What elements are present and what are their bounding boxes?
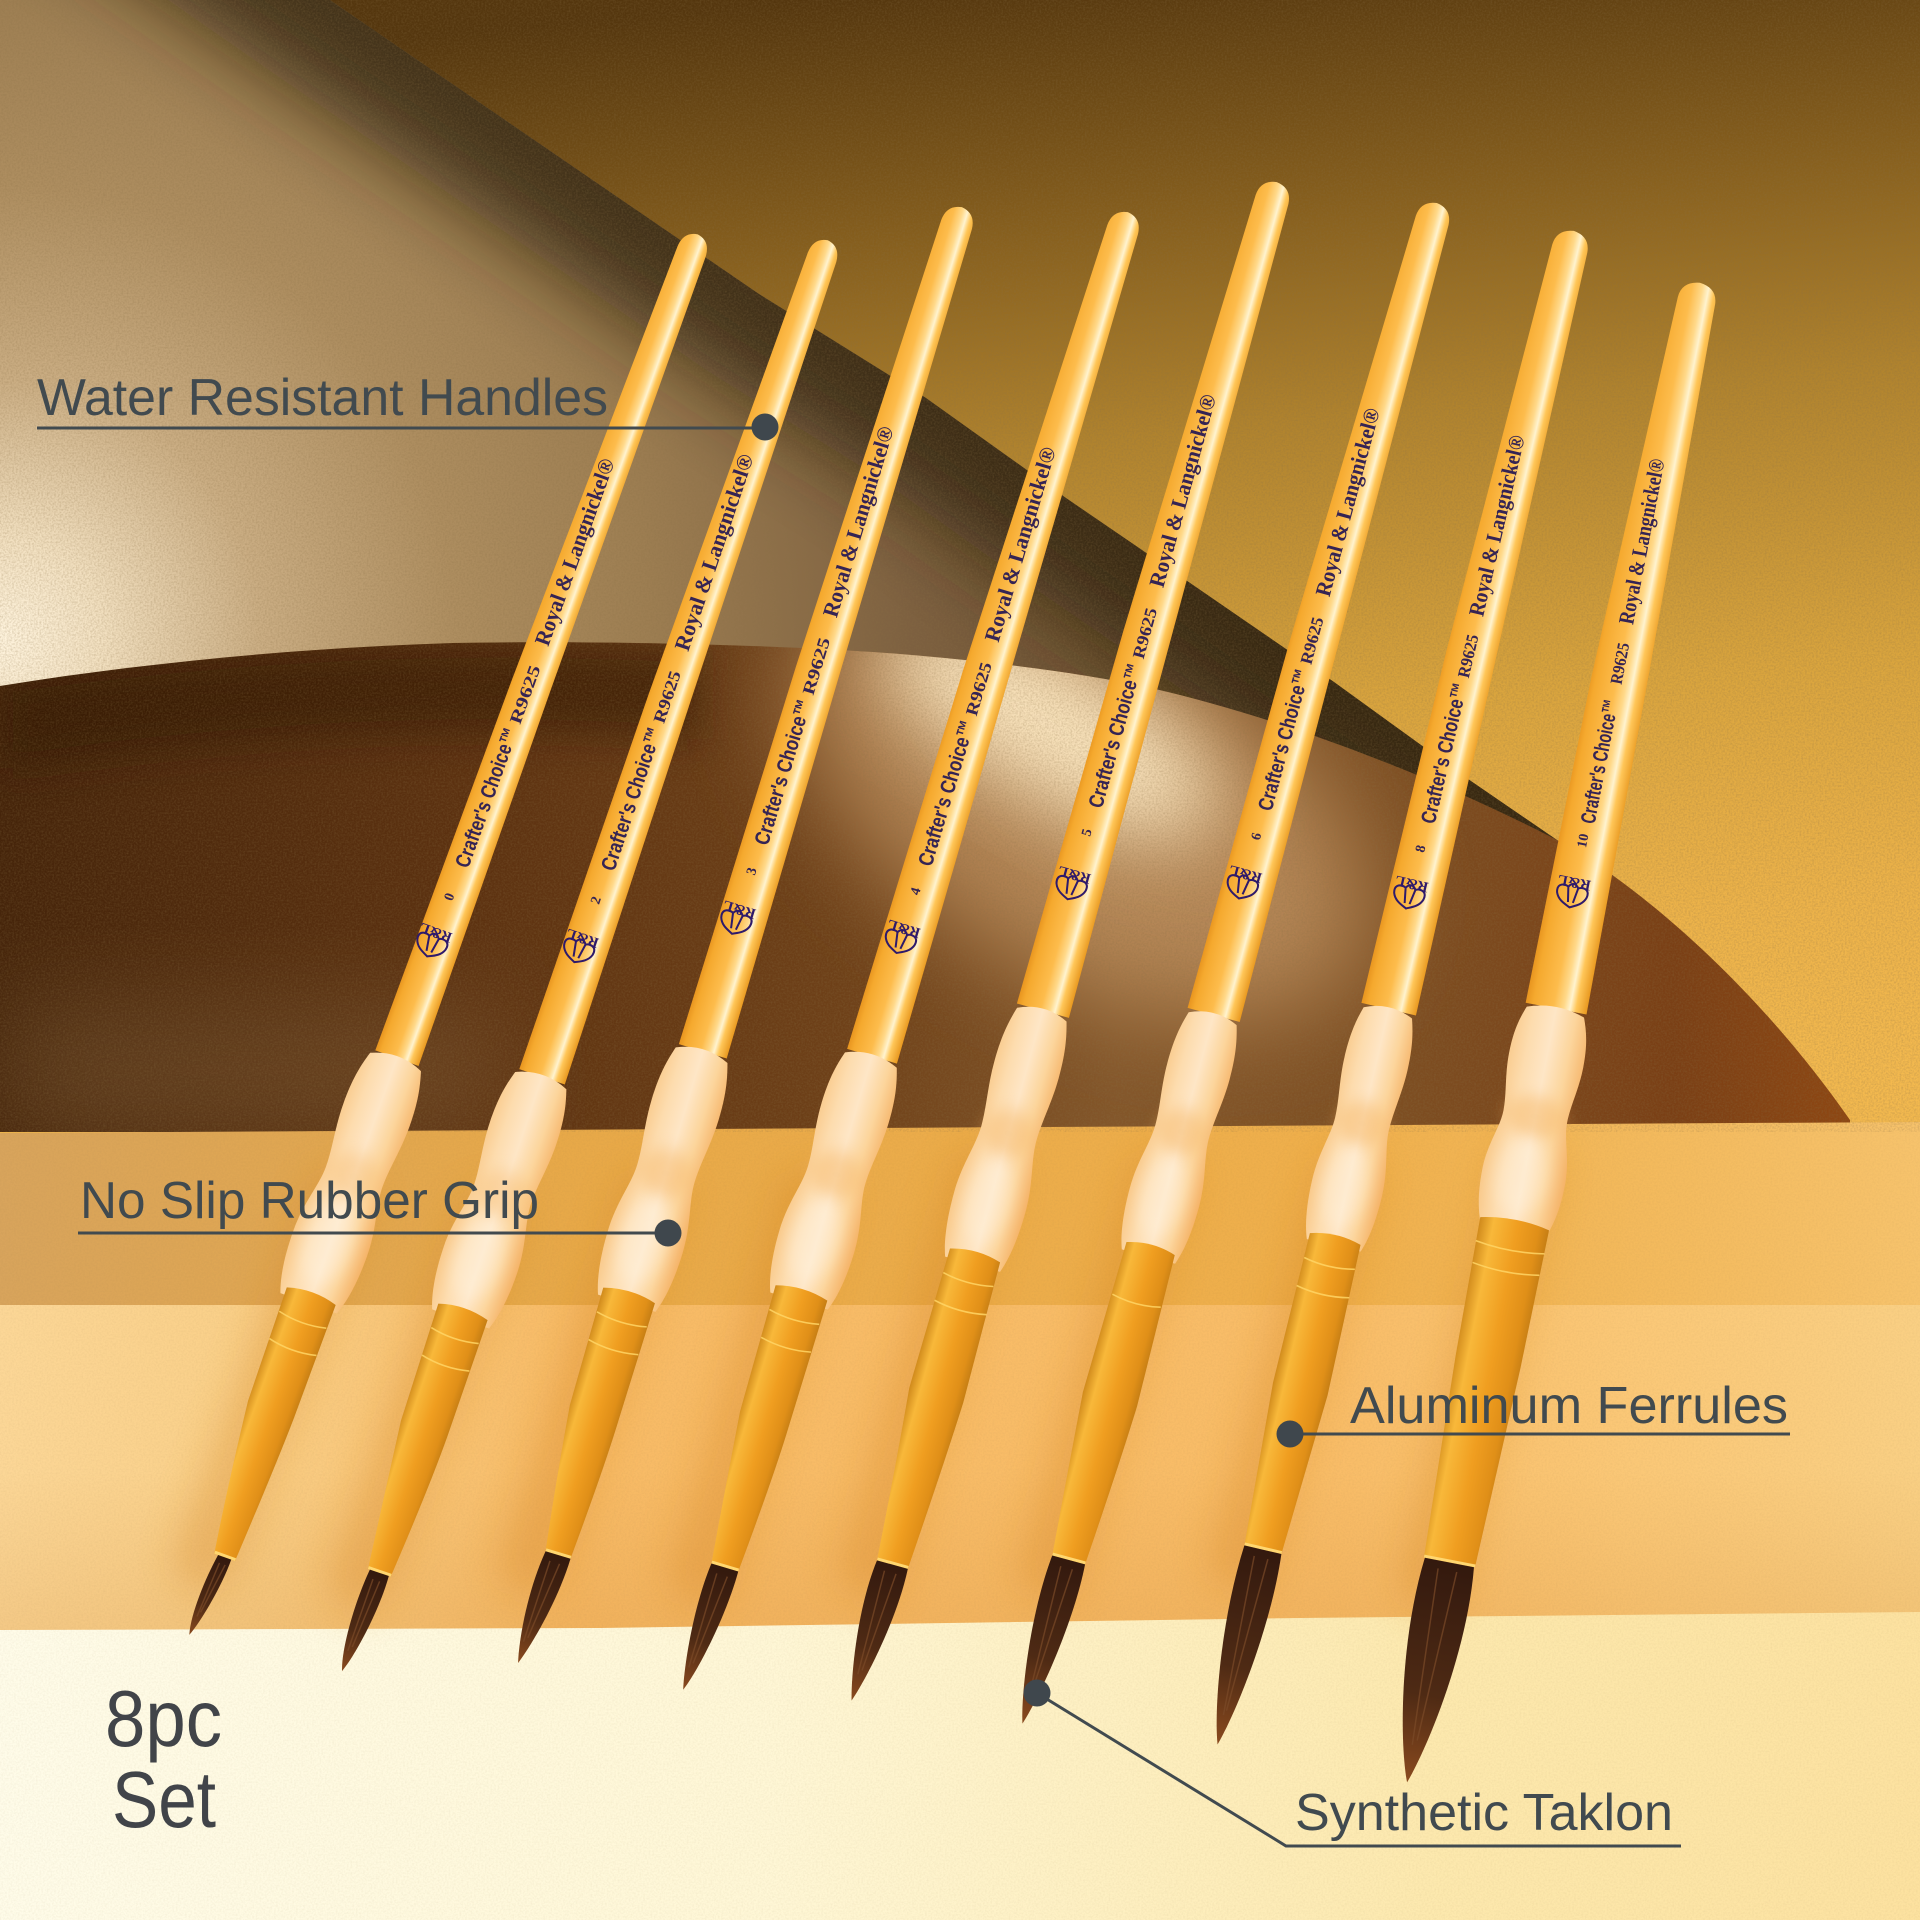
- bristles: [186, 1554, 231, 1640]
- handle lettering: [559, 449, 761, 967]
- brush: size 5: [816, 171, 1309, 1711]
- handle: [847, 204, 1149, 1064]
- handle lettering: [716, 422, 901, 939]
- background: lower band edge shading: [0, 1470, 1920, 1635]
- background: middle paper band: [0, 1122, 1920, 1308]
- handle lettering: Royal & Langnickel®: [1144, 391, 1221, 590]
- handle lettering: 8: [1413, 844, 1429, 854]
- bristles: [1006, 1555, 1086, 1729]
- background: upper metallic sheet: [0, 0, 1558, 840]
- bristles: [1198, 1545, 1283, 1749]
- brush: size 10: [1366, 274, 1737, 1790]
- bristles: [334, 1569, 389, 1676]
- handle lettering: Crafter's Choice™: [1577, 697, 1623, 826]
- handle lettering: R9625: [1129, 606, 1161, 661]
- handle lettering: Royal & Langnickel®: [1463, 433, 1530, 618]
- handle lettering: R&L: [564, 925, 601, 950]
- callout: water resistant handles: [37, 369, 778, 440]
- grip: [937, 999, 1079, 1274]
- ferrule: [525, 1284, 656, 1561]
- handle lettering: 0: [442, 891, 458, 903]
- handle lettering: [1553, 455, 1672, 911]
- handle: [679, 199, 982, 1059]
- handle lettering: R9625: [962, 660, 996, 718]
- brush: size 4: [646, 200, 1161, 1701]
- background: cream bottom sheet: [0, 1612, 1920, 1920]
- handle lettering: R9625: [1607, 641, 1633, 686]
- handle lettering: R&L: [721, 896, 758, 921]
- label: 8pc set: [105, 1674, 222, 1844]
- background: gold paper: [0, 0, 1920, 1140]
- handle lettering: Crafter's Choice™: [1085, 661, 1147, 810]
- handle lettering: R&L: [1394, 872, 1430, 895]
- handle lettering: Royal & Langnickel®: [1613, 457, 1670, 626]
- handle lettering: [881, 442, 1063, 958]
- handle lettering: Royal & Langnickel®: [529, 455, 620, 649]
- handle lettering: R&L: [1227, 861, 1264, 885]
- bristles: [510, 1550, 570, 1669]
- handle lettering: R9625: [506, 663, 544, 727]
- handle lettering: 2: [588, 895, 605, 906]
- callout: synthetic taklon: [1024, 1680, 1681, 1846]
- background: lower bronze sheet: [0, 642, 1850, 1132]
- label: 8pc set: 8pc: [105, 1674, 222, 1763]
- callout: synthetic taklon: Synthetic Taklon: [1295, 1784, 1673, 1842]
- brush shadows: [205, 1170, 1525, 1580]
- handle: [1188, 195, 1459, 1022]
- handle lettering: 5: [1079, 827, 1096, 838]
- label: 8pc set: Set: [112, 1755, 216, 1844]
- brush: size 0: [153, 220, 731, 1648]
- grip: [589, 1038, 741, 1315]
- handle lettering: R9625: [1297, 615, 1327, 666]
- handle: [519, 231, 847, 1084]
- handle lettering: Crafter's Choice™: [451, 725, 523, 871]
- handle lettering: R9625: [799, 635, 834, 697]
- handle lettering: R&L: [418, 919, 454, 945]
- callout: no slip rubber grip: [78, 1172, 682, 1246]
- bristles: [1380, 1557, 1476, 1788]
- bristles: [837, 1560, 908, 1706]
- ferrule: [1415, 1213, 1550, 1569]
- handle lettering: 3: [744, 866, 761, 877]
- grip: [762, 1043, 910, 1312]
- grip: [1299, 999, 1424, 1254]
- handle lettering: Crafter's Choice™: [914, 718, 979, 869]
- handle lettering: Royal & Langnickel®: [1310, 405, 1385, 599]
- handle lettering: [1052, 390, 1224, 904]
- callout: no slip rubber grip: No Slip Rubber Grip: [80, 1172, 539, 1230]
- ferrule: [1236, 1229, 1363, 1556]
- handle lettering: [1223, 404, 1387, 903]
- handle lettering: Crafter's Choice™: [1417, 680, 1472, 826]
- handle: [1361, 224, 1597, 1016]
- handle lettering: [1390, 431, 1532, 912]
- handle lettering: Royal & Langnickel®: [669, 451, 759, 654]
- handle: [1526, 276, 1726, 1015]
- background: lower paper band: [0, 1305, 1920, 1635]
- ferrule: [863, 1244, 1003, 1571]
- grip: [1114, 1004, 1249, 1266]
- handle lettering: R&L: [1556, 871, 1592, 893]
- brush: size 8: [1183, 222, 1605, 1753]
- bristles: [673, 1563, 738, 1695]
- ferrule: [694, 1281, 828, 1574]
- handle lettering: R9625: [1454, 632, 1483, 680]
- handle lettering: 10: [1575, 833, 1592, 849]
- handle lettering: R&L: [886, 916, 922, 940]
- ferrule: [194, 1284, 337, 1564]
- ferrule: [351, 1300, 489, 1580]
- ferrule: [1040, 1237, 1179, 1567]
- handle: [1017, 174, 1299, 1018]
- callout: water resistant handles: Water Resistant Handles: [37, 369, 608, 427]
- handle: [375, 225, 716, 1066]
- grip: [1472, 999, 1598, 1240]
- handle lettering: Crafter's Choice™: [1254, 666, 1314, 813]
- grip: [272, 1043, 434, 1317]
- brush: size 6: [988, 193, 1468, 1733]
- callout: aluminum ferrules: [1276, 1377, 1790, 1448]
- handle lettering: R&L: [1056, 862, 1093, 886]
- handle lettering: Crafter's Choice™: [751, 697, 816, 848]
- handle lettering: Royal & Langnickel®: [979, 444, 1061, 645]
- handle lettering: R9625: [650, 668, 685, 726]
- grip: [424, 1063, 580, 1331]
- brush: size 2: [305, 227, 861, 1684]
- brush: size 3: [481, 195, 995, 1674]
- handle lettering: Royal & Langnickel®: [817, 423, 899, 620]
- handle lettering: 4: [908, 886, 925, 897]
- handle lettering: 6: [1249, 831, 1265, 842]
- handle lettering: Crafter's Choice™: [597, 724, 667, 874]
- callout: aluminum ferrules: Aluminum Ferrules: [1350, 1377, 1788, 1435]
- handle lettering: [412, 453, 622, 962]
